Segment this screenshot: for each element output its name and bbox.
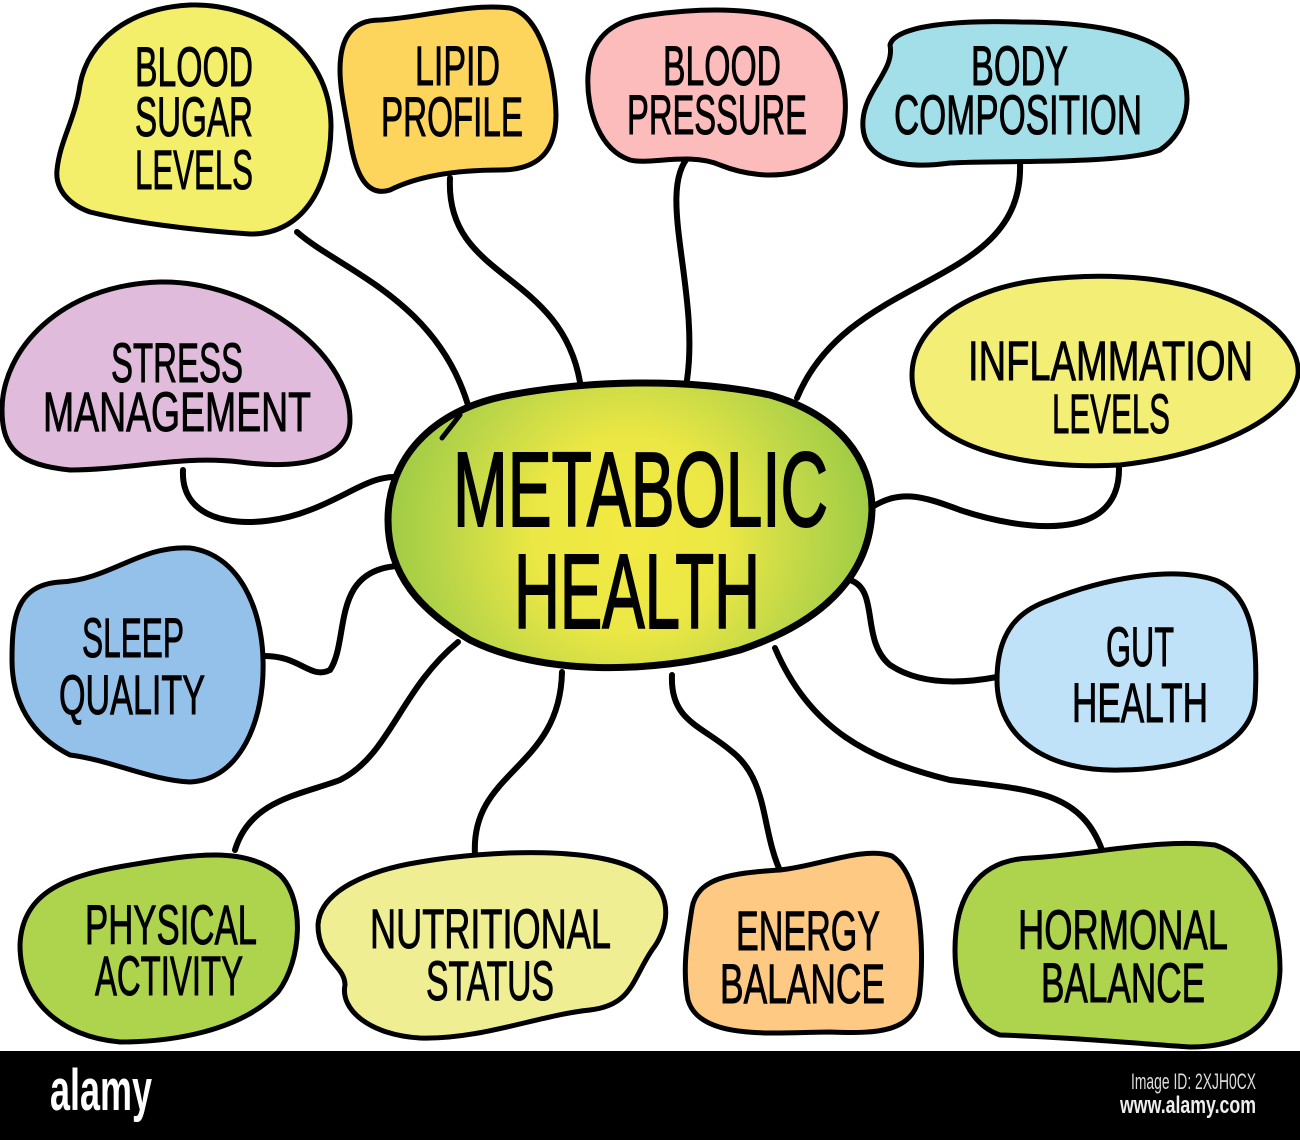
node: body composition: BODY bbox=[971, 34, 1068, 97]
node: sleep quality: QUALITY bbox=[59, 663, 205, 726]
node: physical activity: ACTIVITY bbox=[95, 944, 243, 1007]
node: gut health bbox=[997, 574, 1256, 770]
node: lipid profile bbox=[340, 7, 556, 191]
node: blood sugar levels: BLOOD bbox=[135, 35, 253, 98]
footer logo: alamy bbox=[50, 1058, 152, 1123]
node: blood sugar levels: SUGAR bbox=[135, 85, 253, 148]
node: blood sugar levels bbox=[57, 5, 331, 234]
node: sleep quality: SLEEP bbox=[82, 606, 184, 669]
node: stress management: STRESS bbox=[111, 331, 243, 394]
node: nutritional status: NUTRITIONAL bbox=[370, 897, 611, 960]
node: stress management bbox=[2, 282, 350, 470]
node: stress management: MANAGEMENT bbox=[43, 380, 311, 443]
node: blood sugar levels: LEVELS bbox=[135, 138, 253, 201]
node: blood pressure: PRESSURE bbox=[627, 83, 807, 146]
node: physical activity bbox=[20, 855, 297, 1042]
connectors bbox=[183, 155, 1119, 875]
website: www.alamy.com bbox=[1119, 1092, 1256, 1119]
node: energy balance: BALANCE bbox=[720, 952, 885, 1015]
node: inflammation levels: LEVELS bbox=[1052, 382, 1170, 445]
node: lipid profile: PROFILE bbox=[381, 85, 523, 148]
node: hormonal balance bbox=[955, 843, 1280, 1047]
footer bar bbox=[0, 1051, 1300, 1140]
central node: metabolic health bbox=[388, 383, 872, 668]
node: gut health: HEALTH bbox=[1072, 671, 1208, 734]
node: energy balance bbox=[685, 853, 922, 1033]
node: inflammation levels bbox=[912, 276, 1298, 466]
node: sleep quality bbox=[12, 548, 263, 782]
node: body composition: COMPOSITION bbox=[894, 83, 1142, 146]
node: hormonal balance: BALANCE bbox=[1041, 951, 1205, 1014]
node: energy balance: ENERGY bbox=[736, 899, 880, 962]
node: blood pressure: BLOOD bbox=[663, 34, 781, 97]
node: nutritional status bbox=[318, 853, 666, 1038]
central node: metabolic health: METABOLIC bbox=[453, 431, 828, 549]
node: lipid profile: LIPID bbox=[415, 34, 500, 97]
node: physical activity: PHYSICAL bbox=[85, 893, 257, 956]
node: nutritional status: STATUS bbox=[426, 949, 554, 1012]
node: gut health: GUT bbox=[1106, 615, 1174, 678]
node: body composition bbox=[863, 22, 1187, 165]
node: blood pressure bbox=[588, 10, 845, 175]
central node: metabolic health: HEALTH bbox=[514, 533, 760, 651]
